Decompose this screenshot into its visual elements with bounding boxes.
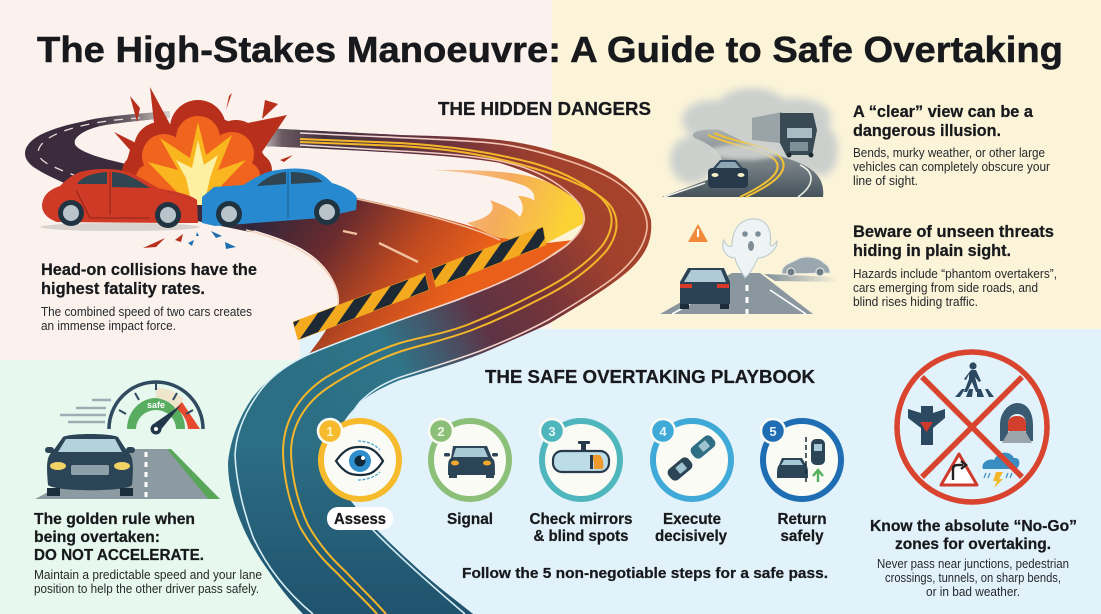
icon: eye bbox=[336, 441, 383, 480]
warning triangle bbox=[688, 224, 708, 242]
step 3: check mirrors: Check mirrors bbox=[530, 511, 632, 528]
icon: speedometer and car on road bbox=[35, 382, 220, 499]
text block: golden rule: being overtaken: bbox=[34, 529, 160, 546]
text block: no-go zones: zones for overtaking. bbox=[895, 536, 1051, 553]
icon: junction bbox=[908, 406, 945, 445]
text block: head-on collisions: highest fatality rates. bbox=[41, 280, 205, 298]
icon: storm cloud bbox=[982, 453, 1019, 488]
text block: head-on collisions bbox=[41, 261, 257, 333]
rear car bbox=[680, 268, 730, 309]
text block: golden rule bbox=[34, 511, 262, 596]
step 5: return safely: safely bbox=[780, 528, 824, 545]
icon: no-go zones prohibition sign bbox=[897, 352, 1047, 502]
blue car bbox=[202, 168, 357, 227]
text block: no-go zones bbox=[870, 518, 1077, 599]
speedometer bbox=[60, 382, 203, 434]
text block: unseen threats: blind rises hiding traffic. bbox=[853, 294, 978, 309]
title: The High-Stakes Manoeuvre: A Guide to Safe Overtaking bbox=[37, 29, 1063, 70]
step 5: return safely: 5 bbox=[769, 424, 777, 439]
icon: car returning to lane bbox=[777, 437, 825, 482]
barrier: hazard striped road block bbox=[293, 227, 546, 340]
icon: truck emerging from fog on bending road bbox=[662, 88, 838, 197]
caption: follow the 5 steps: Follow the 5 non-negotiable steps for a safe pass. bbox=[462, 565, 828, 582]
crash debris bbox=[143, 231, 236, 249]
step 2: signal: Signal bbox=[447, 511, 493, 528]
step 3: check mirrors: 3 bbox=[548, 424, 556, 439]
icon: sharp bend sign bbox=[941, 454, 977, 485]
text block: no-go zones: or in bad weather. bbox=[926, 584, 1020, 599]
text block: clear view illusion: dangerous illusion. bbox=[853, 121, 1001, 140]
side car bbox=[782, 257, 830, 274]
road: winding road linking all sections bbox=[25, 111, 651, 614]
text block: clear view illusion: A “clear” view can be a bbox=[853, 102, 1034, 121]
front car bbox=[45, 434, 135, 496]
road bbox=[35, 449, 220, 499]
icon: tunnel bbox=[1000, 403, 1033, 443]
icon: overtaking cars bbox=[666, 433, 717, 483]
red car bbox=[40, 169, 200, 231]
step 3: check mirrors: & blind spots bbox=[534, 528, 628, 545]
heading: the hidden dangers: THE HIDDEN DANGERS bbox=[438, 99, 651, 119]
text block: golden rule: DO NOT ACCELERATE. bbox=[34, 547, 204, 564]
text block: head-on collisions: an immense impact force. bbox=[41, 318, 176, 333]
step 5: return safely bbox=[761, 419, 841, 545]
icon: rear-view mirror bbox=[553, 441, 609, 472]
step 4: execute: decisively bbox=[655, 528, 727, 545]
text block: head-on collisions: The combined speed of two cars creates bbox=[41, 304, 252, 319]
text block: unseen threats: cars emerging from side roads, and bbox=[853, 280, 1038, 295]
step 4: execute: Execute bbox=[663, 511, 721, 528]
icon: ghost car and unseen threats bbox=[660, 219, 838, 314]
heading: safe overtaking playbook: THE SAFE OVERTAKING PLAYBOOK bbox=[485, 367, 815, 387]
step 3: check mirrors bbox=[530, 419, 632, 545]
text block: unseen threats bbox=[853, 222, 1057, 309]
step 4: execute bbox=[651, 419, 731, 545]
text block: head-on collisions: Head-on collisions have the bbox=[41, 261, 257, 279]
step 4: execute: 4 bbox=[659, 424, 667, 439]
icon: car with indicators bbox=[444, 446, 498, 478]
step 2: signal: 2 bbox=[437, 424, 445, 439]
icon: head-on collision with explosion bbox=[40, 87, 357, 249]
text block: golden rule: Maintain a predictable speed and your lane bbox=[34, 567, 262, 582]
text block: golden rule: position to help the other driver pass safely. bbox=[34, 581, 259, 596]
step 2: signal bbox=[429, 419, 509, 528]
text block: unseen threats: hiding in plain sight. bbox=[853, 241, 1011, 260]
text block: unseen threats: Beware of unseen threats bbox=[853, 222, 1054, 241]
text block: clear view illusion: line of sight. bbox=[853, 173, 918, 188]
text block: clear view illusion: Bends, murky weather, or other large bbox=[853, 145, 1045, 160]
explosion bbox=[114, 87, 293, 205]
text block: no-go zones: Never pass near junctions, pedestrian bbox=[877, 556, 1069, 571]
ghost bbox=[723, 219, 777, 278]
text block: clear view illusion bbox=[853, 102, 1051, 188]
text block: clear view illusion: vehicles can completely obscure your bbox=[853, 159, 1051, 174]
icon: pedestrian crossing bbox=[955, 362, 994, 397]
step 1: assess bbox=[318, 419, 399, 530]
text block: unseen threats: Hazards include “phantom overtakers”, bbox=[853, 266, 1057, 281]
text block: golden rule: The golden rule when bbox=[34, 511, 195, 528]
text block: no-go zones: Know the absolute “No-Go” bbox=[870, 518, 1077, 535]
text block: no-go zones: crossings, tunnels, on sharp bends, bbox=[885, 570, 1061, 585]
step 1: assess: Assess bbox=[334, 511, 386, 528]
speedometer: safe bbox=[147, 400, 165, 410]
step 1: assess: 1 bbox=[326, 424, 334, 439]
step 5: return safely: Return bbox=[778, 511, 826, 528]
